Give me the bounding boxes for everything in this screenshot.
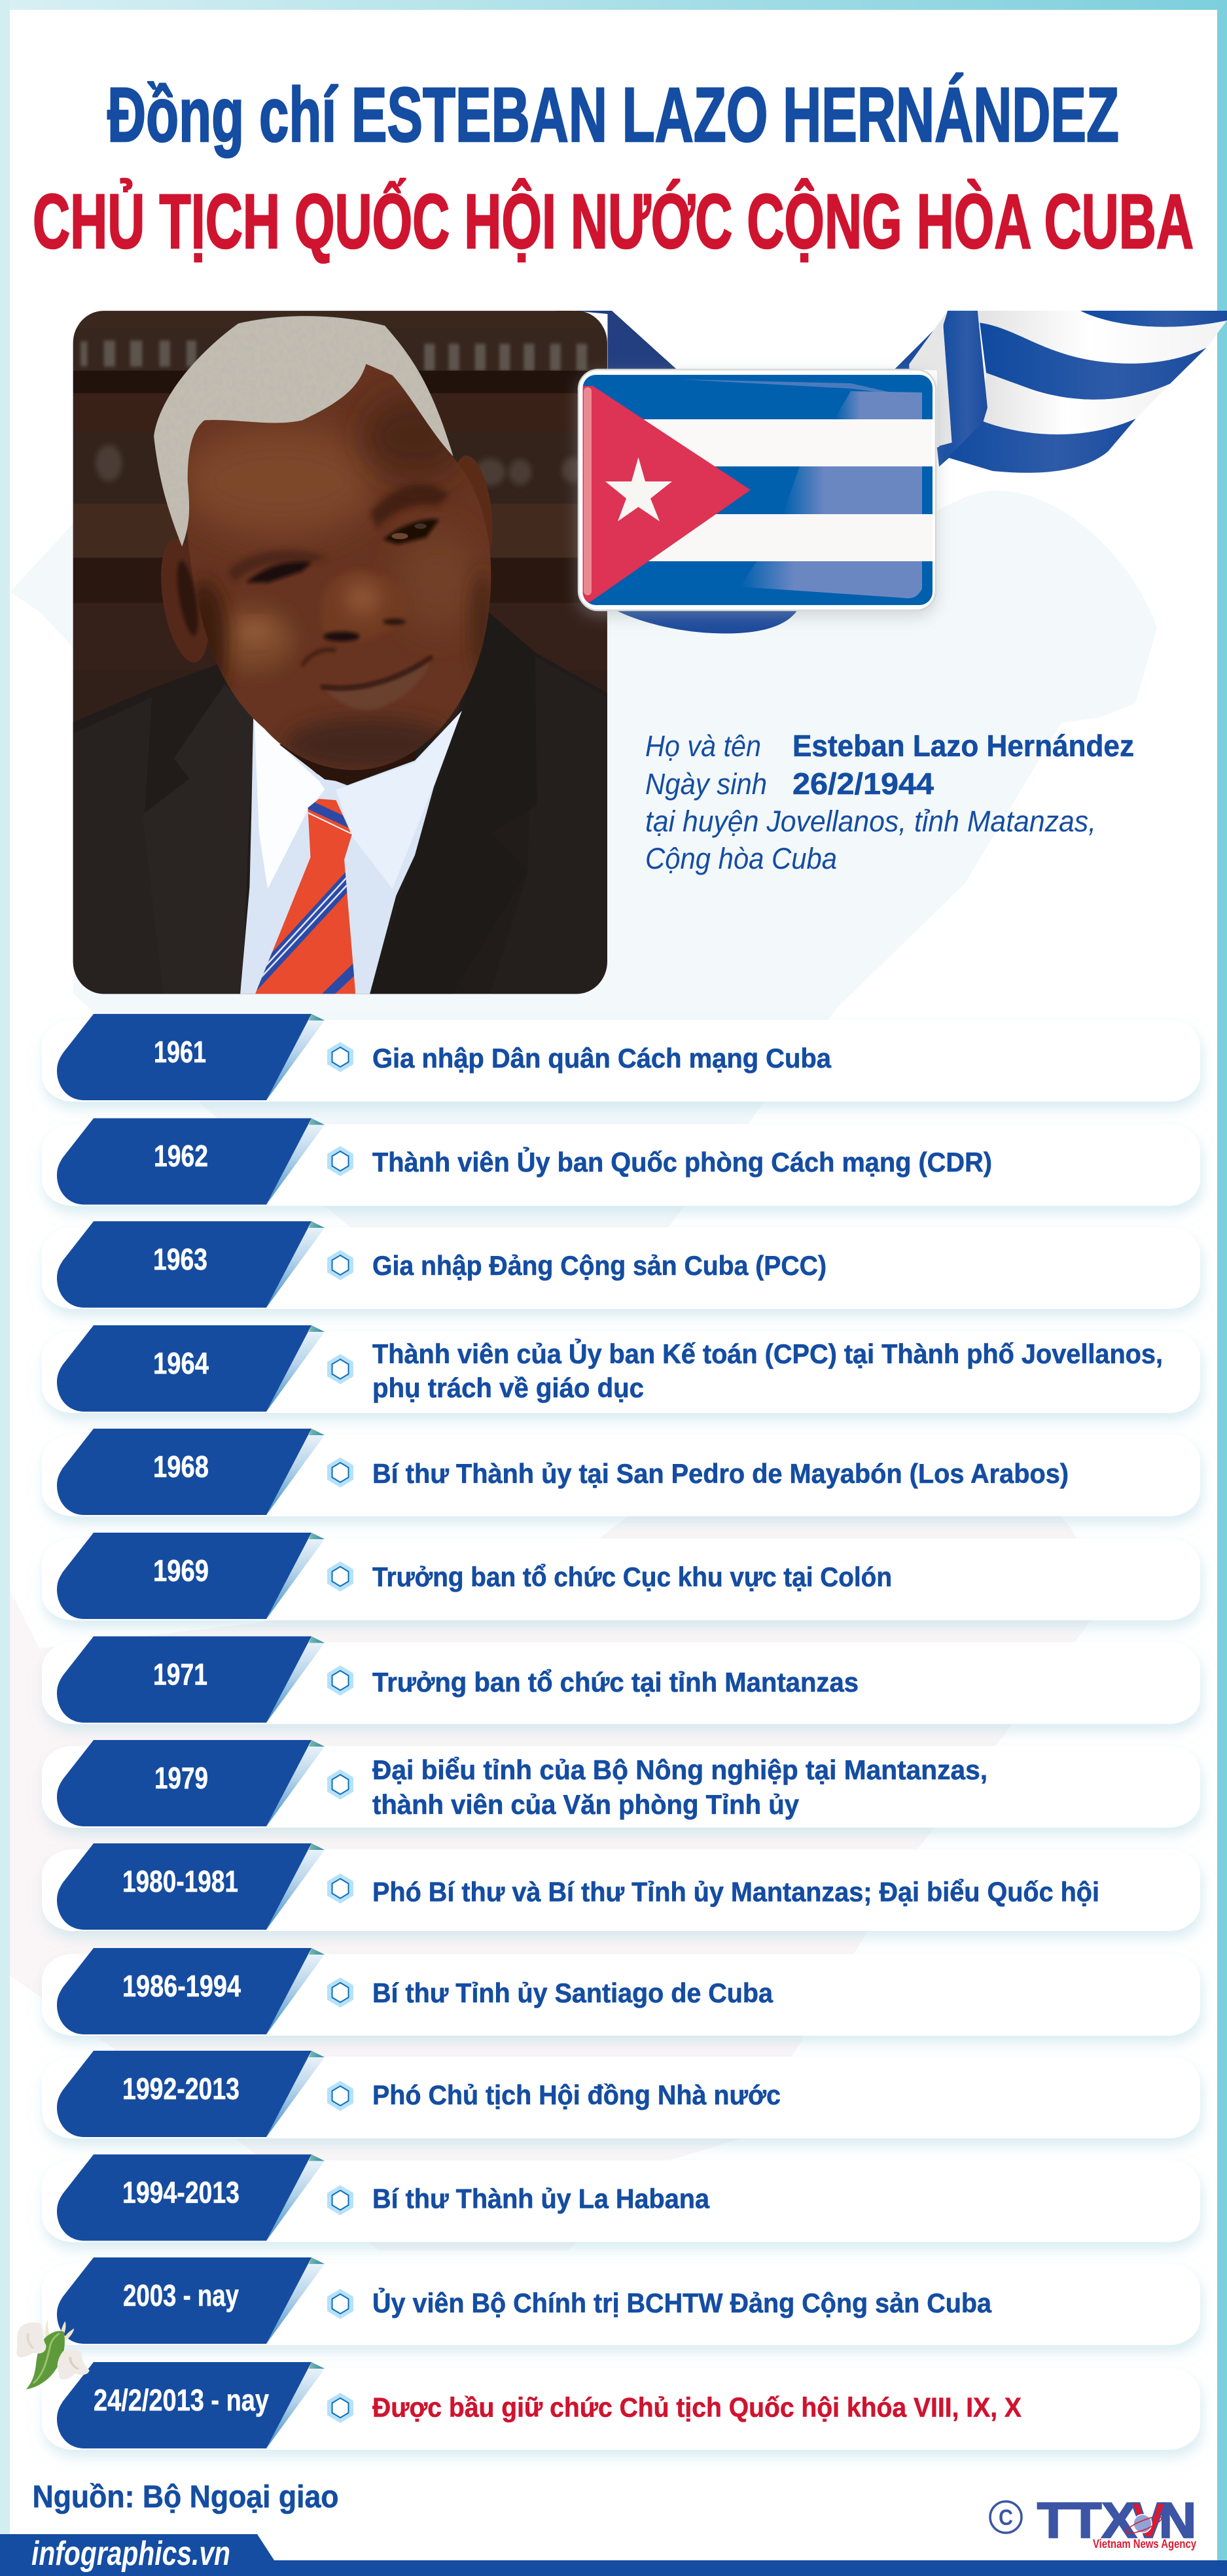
logo letters TTX: TTX [1037, 2493, 1137, 2549]
year: 1969 [153, 1554, 209, 1588]
eyes and brows [227, 484, 449, 582]
icon: hexagon [327, 1665, 353, 1696]
icon: hexagon [327, 1873, 353, 1904]
event line 2: phụ trách về giáo dục [372, 1372, 644, 1403]
suit jacket [73, 653, 607, 994]
icon: hexagon [327, 1146, 353, 1176]
card [42, 2263, 1200, 2345]
year: 1962 [154, 1139, 208, 1173]
event: Gia nhập Dân quân Cách mạng Cuba [372, 1043, 832, 1073]
timeline row 1961 [42, 1014, 1200, 1102]
copyright symbol: C [999, 2505, 1013, 2530]
flag field [582, 375, 933, 606]
year: 1992-2013 [122, 2072, 240, 2106]
year tag [57, 1014, 325, 1100]
timeline row 24/2/2013 - nay [42, 2362, 1200, 2450]
card [42, 2057, 1200, 2138]
year tag [57, 1221, 325, 1308]
timeline row 1962 [42, 1119, 1200, 1206]
mouth [302, 650, 432, 710]
shirt [240, 711, 462, 994]
birth place line 1: tại huyện Jovellanos, tỉnh Matanzas, [645, 805, 1096, 838]
event: Bí thư Thành ủy tại San Pedro de Mayabón (Los Arabos) [372, 1458, 1069, 1489]
event line 1: Thành viên của Ủy ban Kế toán (CPC) tại Thành phố Jovellanos, [372, 1338, 1163, 1369]
neck shadow [280, 744, 415, 783]
timeline row 1979 [42, 1740, 1200, 1828]
full name: Esteban Lazo Hernández [792, 729, 1134, 763]
year: 1986-1994 [122, 1969, 241, 2003]
year: 2003 - nay [123, 2278, 239, 2312]
year tag [57, 1119, 325, 1205]
icon: hexagon [327, 2081, 353, 2111]
title [33, 72, 1194, 265]
website: infographics.vn [31, 2535, 230, 2573]
card [42, 1331, 1200, 1413]
card [42, 1227, 1200, 1309]
card [42, 1124, 1200, 1206]
card [42, 2160, 1200, 2242]
year tag [57, 1843, 325, 1930]
logo letter N: N [1159, 2493, 1196, 2549]
birth date label: Ngày sinh [645, 767, 767, 801]
copyright symbol [990, 2501, 1022, 2533]
icon: hexagon [327, 2393, 353, 2423]
icon: hexagon [327, 1250, 353, 1280]
photo background: dark wood panelling [73, 311, 607, 994]
year tag [57, 1637, 325, 1723]
birth date: 26/2/1944 [792, 767, 934, 801]
event: Phó Bí thư và Bí thư Tỉnh ủy Mantanzas; Đại biểu Quốc hội [372, 1876, 1099, 1907]
flag ribbon [556, 311, 1227, 633]
card [42, 1954, 1200, 2036]
year: 1979 [154, 1761, 208, 1795]
icon: hexagon [327, 1457, 353, 1488]
background shape: pale blue blob [10, 491, 1157, 1230]
footer bar [0, 2534, 1227, 2576]
icon: hexagon [327, 1354, 353, 1384]
year tag [57, 2051, 325, 2137]
background shape: pale pink blob [10, 1465, 1091, 2250]
ears [152, 452, 498, 668]
event: Thành viên Ủy ban Quốc phòng Cách mạng (CDR) [372, 1146, 992, 1177]
face [182, 341, 494, 772]
event: Trưởng ban tổ chức Cục khu vực tại Colón [372, 1561, 892, 1592]
card [42, 1642, 1200, 1724]
icon: hexagon [327, 2185, 353, 2215]
timeline row 1971 [42, 1637, 1200, 1724]
year tag [57, 1325, 325, 1412]
year: 1968 [153, 1450, 209, 1484]
year tag [57, 1740, 325, 1826]
event: Bí thư Thành ủy La Habana [372, 2184, 710, 2214]
event: Được bầu giữ chức Chủ tịch Quốc hội khóa VIII, IX, X [372, 2392, 1022, 2423]
year: 1963 [153, 1242, 207, 1276]
event: Phó Chủ tịch Hội đồng Nhà nước [372, 2080, 781, 2110]
logo tagline: Vietnam News Agency [1093, 2537, 1196, 2550]
event: Ủy viên Bộ Chính trị BCHTW Đảng Cộng sản Cuba [372, 2287, 992, 2318]
icon: white flower sprig [16, 2319, 90, 2390]
year: 24/2/2013 - nay [94, 2383, 269, 2417]
card [42, 1020, 1200, 1102]
event line 1: Đại biểu tỉnh của Bộ Nông nghiệp tại Mantanzas, [372, 1754, 987, 1785]
birth place line 2: Cộng hòa Cuba [645, 842, 837, 875]
flag frame [578, 370, 936, 610]
logo: TTXVN [990, 2493, 1196, 2550]
event line 2: thành viên của Văn phòng Tỉnh ủy [372, 1789, 800, 1820]
year tag [57, 2257, 325, 2344]
lapels [145, 684, 453, 994]
event: Gia nhập Đảng Cộng sản Cuba (PCC) [372, 1250, 827, 1281]
year tag [57, 1533, 325, 1619]
year tag [57, 2362, 325, 2448]
icon: hexagon [327, 1561, 353, 1592]
frame: right band [1217, 0, 1227, 2564]
frame: top band [0, 0, 1227, 10]
personal information block [645, 729, 1134, 875]
icon: hexagon [327, 1977, 353, 2008]
necktie [255, 799, 356, 994]
icon: hexagon [327, 1769, 353, 1800]
timeline row 1992-2013 [42, 2051, 1200, 2138]
card [42, 2368, 1200, 2450]
event: Trưởng ban tổ chức tại tỉnh Mantanzas [372, 1667, 859, 1697]
logo letter V: V [1131, 2493, 1165, 2549]
timeline row 1980-1981 [42, 1843, 1200, 1931]
timeline row 1969 [42, 1533, 1200, 1620]
hair [154, 316, 453, 546]
flag star [605, 457, 672, 521]
year tag [57, 1429, 325, 1515]
icon: hexagon [327, 2289, 353, 2319]
timeline row 1968 [42, 1429, 1200, 1516]
year: 1961 [154, 1035, 206, 1069]
cuban flag badge [578, 370, 936, 610]
logo globe [1124, 2514, 1164, 2536]
card [42, 1746, 1200, 1828]
timeline row 1963 [42, 1221, 1200, 1309]
timeline row 1994-2013 [42, 2155, 1200, 2242]
year: 1994-2013 [122, 2176, 240, 2210]
year: 1971 [153, 1658, 207, 1692]
nose [321, 571, 409, 642]
timeline row 2003 - nay [42, 2257, 1200, 2345]
year: 1964 [153, 1346, 209, 1380]
event: Bí thư Tỉnh ủy Santiago de Cuba [372, 1977, 774, 2008]
card [42, 1435, 1200, 1516]
timeline row 1986-1994 [42, 1948, 1200, 2036]
portrait photo [73, 311, 607, 995]
icon: hexagon [327, 1042, 353, 1072]
frame: left band [0, 0, 10, 2538]
year: 1980-1981 [122, 1864, 238, 1898]
timeline row 1964 [42, 1325, 1200, 1413]
full name label: Họ và tên [645, 729, 761, 763]
card [42, 1539, 1200, 1620]
card [42, 1849, 1200, 1931]
year tag [57, 1948, 325, 2034]
year tag [57, 2155, 325, 2241]
source: Nguồn: Bộ Ngoại giao [33, 2480, 339, 2515]
